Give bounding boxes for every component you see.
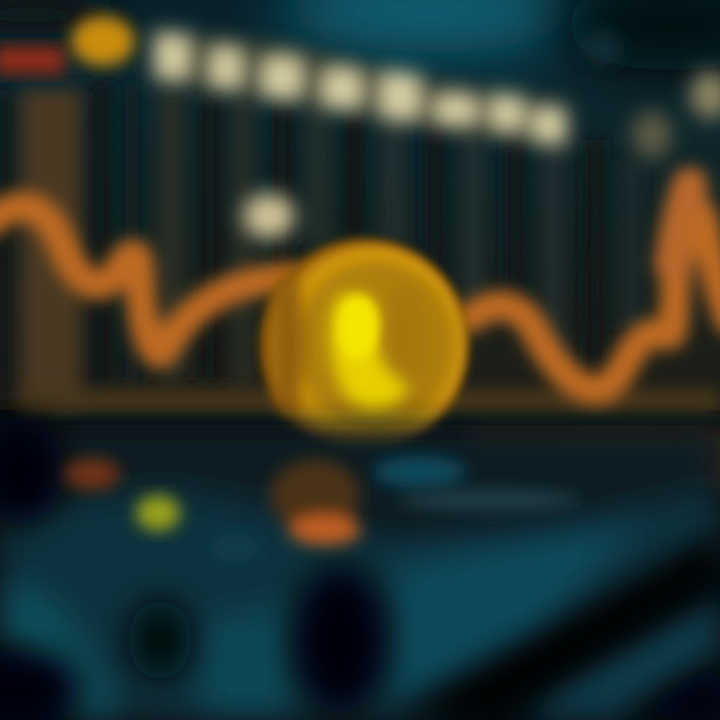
coin stand and desk objects — [211, 459, 580, 562]
lower teal desk surface — [0, 425, 720, 720]
chart bars: vertical columns behind the line — [0, 80, 639, 410]
indicator light: lime green — [136, 495, 180, 531]
marker dot above the line — [243, 193, 295, 239]
dark shadows in the foreground — [0, 415, 720, 720]
blue cap beneath the coin — [374, 456, 466, 488]
icon: small orange coin, top left — [71, 16, 135, 66]
blurred text blobs, top right — [584, 34, 720, 159]
floor band of the chart — [20, 390, 720, 486]
icon: large gold coin — [260, 239, 468, 451]
line chart: orange wave — [0, 185, 720, 390]
indicator light: red-orange — [64, 458, 120, 490]
red marker bar, top left — [0, 46, 65, 74]
title: blurred letter shapes — [150, 28, 570, 148]
